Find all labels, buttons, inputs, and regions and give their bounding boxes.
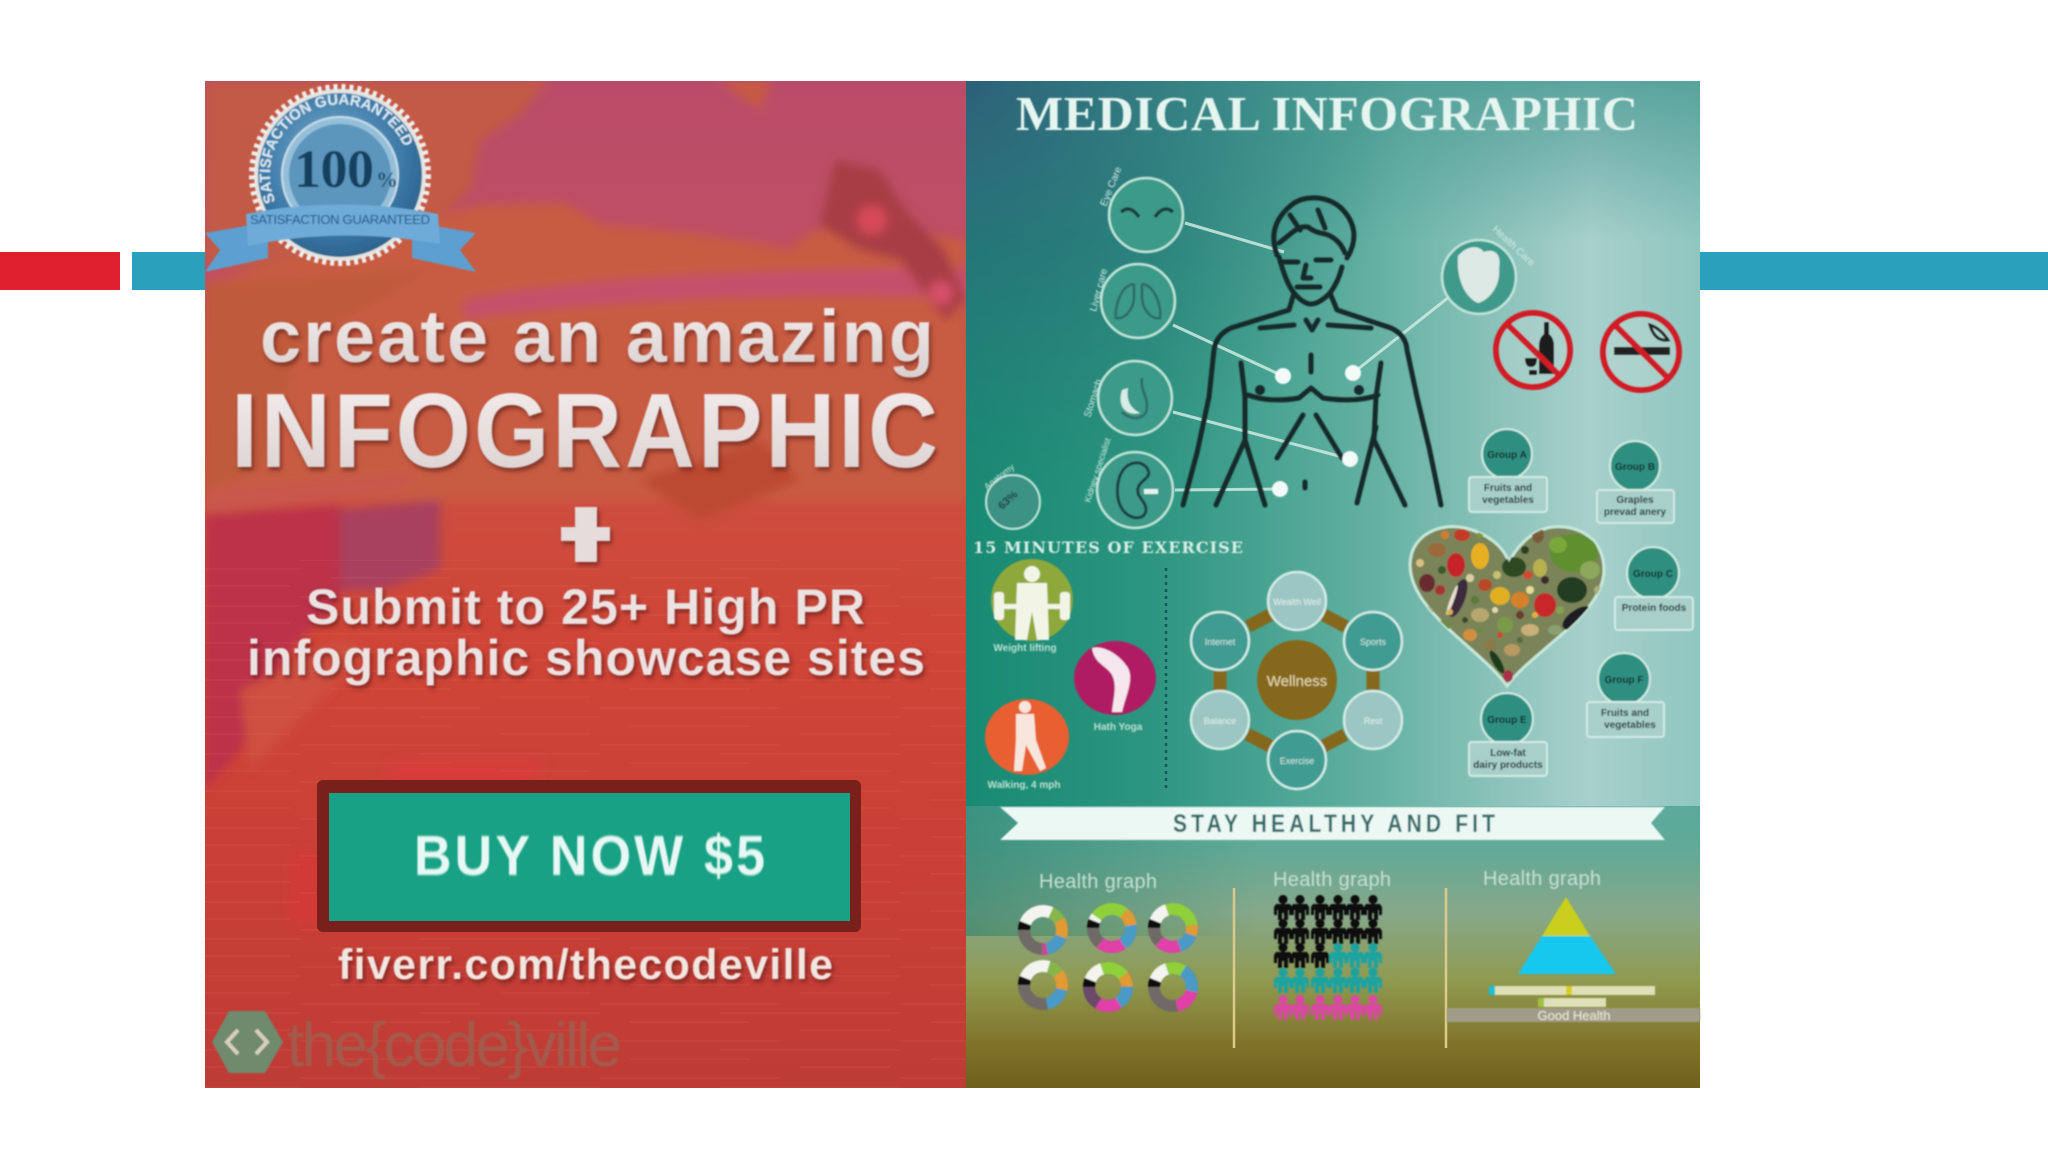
button: buy now xyxy=(317,780,861,932)
button: buy now: BUY NOW $5 xyxy=(414,825,765,887)
human body outline xyxy=(1183,198,1441,505)
badge: satisfaction guaranteed seal xyxy=(204,83,476,273)
wheel node top: Wealth Well xyxy=(1273,597,1321,607)
icon: no smoking xyxy=(1603,314,1679,390)
food group F xyxy=(1587,653,1664,737)
seal ring text: SATISFACTION GUARANTEED xyxy=(258,93,413,204)
icon: heart organ xyxy=(1442,224,1537,314)
food group E: Group E xyxy=(1487,715,1527,726)
wellness wheel xyxy=(1191,572,1402,789)
wellness centre xyxy=(1257,640,1337,720)
pyramid legend xyxy=(1489,986,1655,1007)
food group B xyxy=(1597,441,1674,523)
food group B: Graples xyxy=(1616,495,1654,506)
food group C: Protein foods xyxy=(1622,603,1687,614)
wheel node upper left: Internet xyxy=(1205,637,1236,647)
wheel node upper right: Sports xyxy=(1360,637,1387,647)
exercise: weight lifting: Weight lifting xyxy=(993,643,1057,654)
food group A: Group A xyxy=(1487,450,1527,461)
header bars xyxy=(0,252,2048,290)
wheel node lower right xyxy=(1344,691,1402,749)
wellness centre: Wellness xyxy=(1267,673,1327,690)
food group F: vegetables xyxy=(1604,720,1656,731)
icon: small percentage circle xyxy=(982,462,1040,529)
advert background scenery xyxy=(205,81,966,1088)
donut 2 xyxy=(1093,909,1131,947)
exercise: yoga: Hath Yoga xyxy=(1094,722,1143,733)
plus sign xyxy=(561,507,610,562)
food group E: dairy products xyxy=(1473,760,1543,771)
chart: health pyramid xyxy=(1447,868,1700,1023)
wheel node bottom xyxy=(1268,731,1326,789)
medical lower background xyxy=(966,806,1700,1088)
icon: eye care xyxy=(1099,165,1183,252)
headline: create an amazing: create an amazing xyxy=(260,295,934,378)
dotted divider xyxy=(1165,568,1167,790)
donut 3 xyxy=(1154,909,1192,947)
food group E: Low-fat xyxy=(1490,748,1526,759)
divider lines xyxy=(1234,888,1446,1048)
panel: medical infographic xyxy=(966,81,1700,1088)
subheading xyxy=(247,579,925,686)
food group F: Group F xyxy=(1605,675,1643,686)
donut 6 xyxy=(1154,968,1192,1006)
exercise: weight lifting xyxy=(991,559,1073,654)
exercise: walking xyxy=(985,699,1069,791)
wheel node upper left xyxy=(1191,612,1249,670)
chart: people pictogram: Health graph xyxy=(1273,869,1391,891)
icon: kidney xyxy=(1082,436,1173,528)
icon: kidney: Kidney specialist xyxy=(1082,436,1113,504)
icon: heart organ: Health Care xyxy=(1490,224,1537,269)
food group B: Group B xyxy=(1615,462,1655,473)
good health bar: Good Health xyxy=(1538,1008,1610,1023)
wheel node lower right: Rest xyxy=(1364,716,1383,726)
icon: stomach xyxy=(1082,361,1172,435)
subheading: infographic showcase sites xyxy=(247,630,925,686)
food group F: Fruits and xyxy=(1601,708,1649,719)
wheel node top xyxy=(1268,572,1326,630)
medical upper background xyxy=(966,81,1700,808)
ribbon text: SATISFACTION GUARANTEED xyxy=(250,212,430,227)
icon: lungs: Liver care xyxy=(1088,267,1110,313)
panel: left advert xyxy=(204,81,966,1088)
banner: stay healthy and fit: STAY HEALTHY AND FIT xyxy=(1173,809,1495,837)
good health bar xyxy=(1447,1008,1700,1023)
wheel node lower left: Balance xyxy=(1204,716,1236,726)
food group E xyxy=(1469,693,1547,776)
donut 5 xyxy=(1089,968,1127,1006)
logo: the code ville: the{code}ville xyxy=(287,1011,622,1080)
badge: satisfaction guaranteed seal: % xyxy=(376,167,398,192)
food group A: vegetables xyxy=(1482,495,1534,506)
icon: no alcohol xyxy=(1496,313,1570,387)
icon: lungs xyxy=(1088,264,1175,338)
wheel node bottom: Exercise xyxy=(1280,756,1314,766)
donut 4 xyxy=(1024,966,1062,1004)
icon: stomach: Stomach xyxy=(1082,378,1105,419)
chart: people pictogram xyxy=(1273,869,1391,1020)
seal 100 percent: 100 xyxy=(294,139,374,199)
subheading: Submit to 25+ High PR xyxy=(306,579,865,635)
anatomy connector lines xyxy=(1173,223,1449,490)
banner: stay healthy and fit xyxy=(1000,807,1665,840)
headline: INFOGRAPHIC: INFOGRAPHIC xyxy=(231,372,938,490)
wheel node lower left xyxy=(1191,691,1249,749)
food group B: prevad anery xyxy=(1604,507,1667,518)
food group C: Group C xyxy=(1633,569,1673,580)
heart of vegetables xyxy=(1410,524,1604,686)
anatomy target dots xyxy=(1272,365,1361,497)
food group A: Fruits and xyxy=(1484,483,1532,494)
chart: health pyramid: Health graph xyxy=(1483,868,1601,890)
donut 1 xyxy=(1024,911,1062,949)
chart: donut health graph: Health graph xyxy=(1039,871,1157,893)
chart: donut health graph xyxy=(1024,871,1192,1006)
food group A xyxy=(1469,429,1547,512)
wheel node upper right xyxy=(1344,612,1402,670)
link: fiverr url: fiverr.com/thecodeville xyxy=(338,941,833,989)
icon: small percentage circle: Anatomy xyxy=(982,462,1017,492)
exercise: yoga xyxy=(1074,641,1156,733)
exercise: walking: Walking, 4 mph xyxy=(988,780,1060,791)
food group C xyxy=(1615,547,1693,630)
icon: eye care: Eye Care xyxy=(1099,165,1125,208)
heading: 15 minutes of exercise: 15 MINUTES OF EXERCISE xyxy=(973,538,1243,557)
icon: small percentage circle: 63% xyxy=(996,488,1021,512)
title: MEDICAL INFOGRAPHIC xyxy=(1016,86,1638,141)
